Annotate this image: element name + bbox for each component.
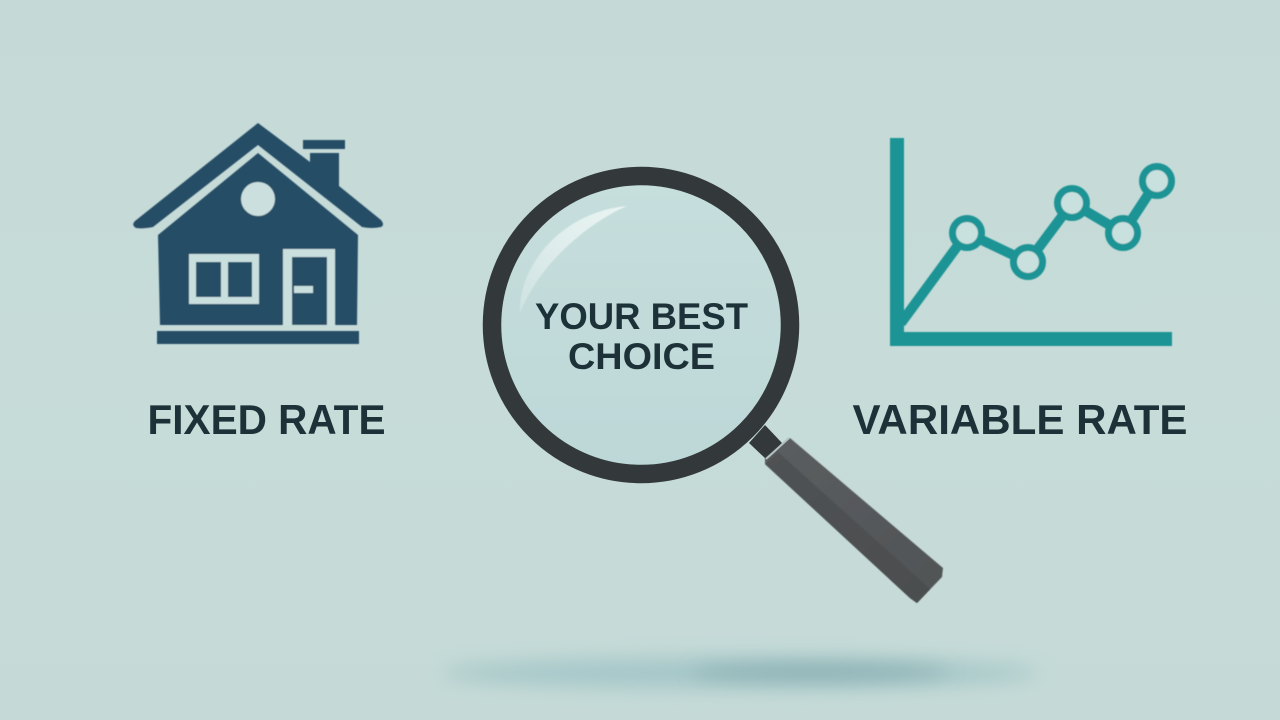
- lens text: YOUR BEST: [535, 296, 748, 337]
- icon: magnifying glass: [492, 176, 943, 603]
- lens text: CHOICE: [568, 336, 715, 377]
- icon: line chart: [897, 138, 1172, 339]
- ground shadow: [440, 658, 1040, 688]
- label: variable rate: VARIABLE RATE: [852, 396, 1188, 443]
- lens text: [535, 296, 748, 377]
- icon: house: [133, 123, 383, 344]
- label: fixed rate: FIXED RATE: [148, 396, 386, 443]
